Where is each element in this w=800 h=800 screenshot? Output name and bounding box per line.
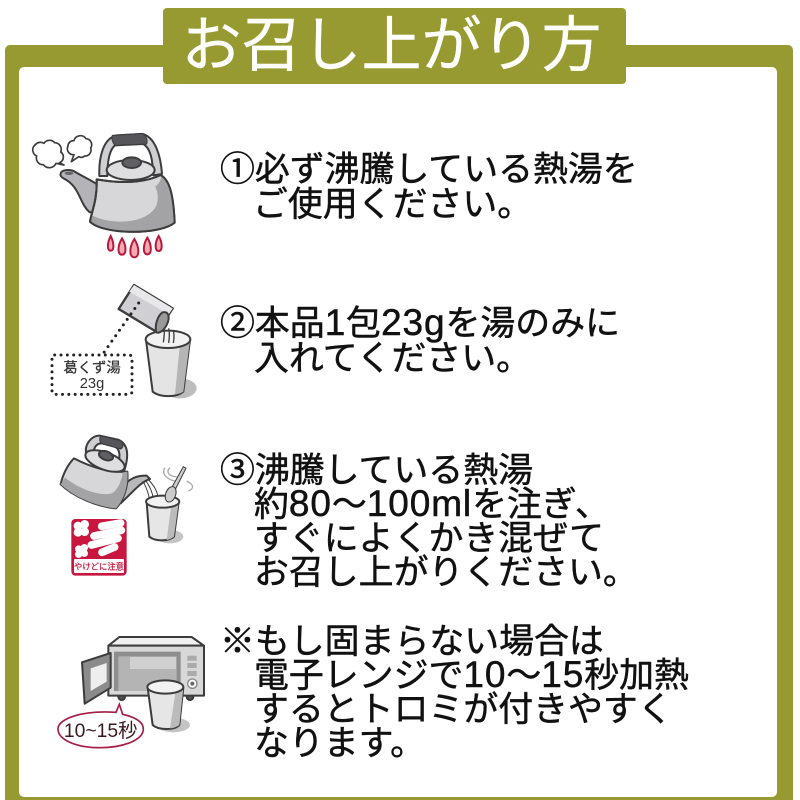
cup bbox=[119, 285, 190, 396]
text block: step 2: ②本品1包23gを湯のみに bbox=[220, 302, 620, 343]
dotted leader bbox=[104, 303, 139, 352]
text block: step 3 bbox=[220, 451, 638, 592]
text block: step 3: ③沸騰している熱湯 bbox=[220, 451, 533, 490]
cup shadow bbox=[163, 378, 197, 398]
text block: note: 電子レンジで10～15秒加熱 bbox=[254, 654, 689, 695]
icon: kettle on flame bbox=[32, 132, 176, 258]
icon: pouring packet into cup bbox=[50, 284, 197, 398]
text block: note: なります。 bbox=[254, 724, 425, 763]
label weight: 23g bbox=[80, 376, 104, 392]
packet bbox=[119, 285, 173, 332]
text block: step 3: 約80～100mlを注ぎ、 bbox=[254, 483, 610, 524]
text block: note: するとトロミが付きやすく bbox=[254, 690, 673, 729]
text block: step 2 bbox=[220, 302, 620, 378]
text block: step 1: ご使用ください。 bbox=[253, 185, 532, 224]
text block: step 1: ①必ず沸騰している熱湯を bbox=[220, 150, 638, 189]
text block: step 2: 入れてください。 bbox=[254, 339, 531, 378]
icon: microwave, cup and timer bubble bbox=[57, 636, 205, 748]
text block: step 1 bbox=[220, 150, 638, 224]
text block: step 3: すぐによくかき混ぜて bbox=[254, 519, 604, 558]
dotted label box bbox=[52, 355, 132, 394]
text block: note: ※もし固まらない場合は bbox=[220, 622, 604, 661]
badge text: やけどに注意 bbox=[74, 561, 124, 571]
icon: burn warning badge bbox=[71, 519, 127, 576]
text block: step 3: お召し上がりください。 bbox=[254, 553, 638, 592]
text block: note bbox=[220, 622, 689, 763]
timer bubble bbox=[58, 704, 143, 748]
timer bubble: 10~15秒 bbox=[64, 720, 137, 742]
title banner bbox=[163, 8, 626, 84]
label text: 葛くず湯 bbox=[63, 360, 121, 377]
title: お召し上がり方 bbox=[182, 12, 602, 79]
icon: pouring kettle, cup and spoon bbox=[60, 434, 194, 576]
